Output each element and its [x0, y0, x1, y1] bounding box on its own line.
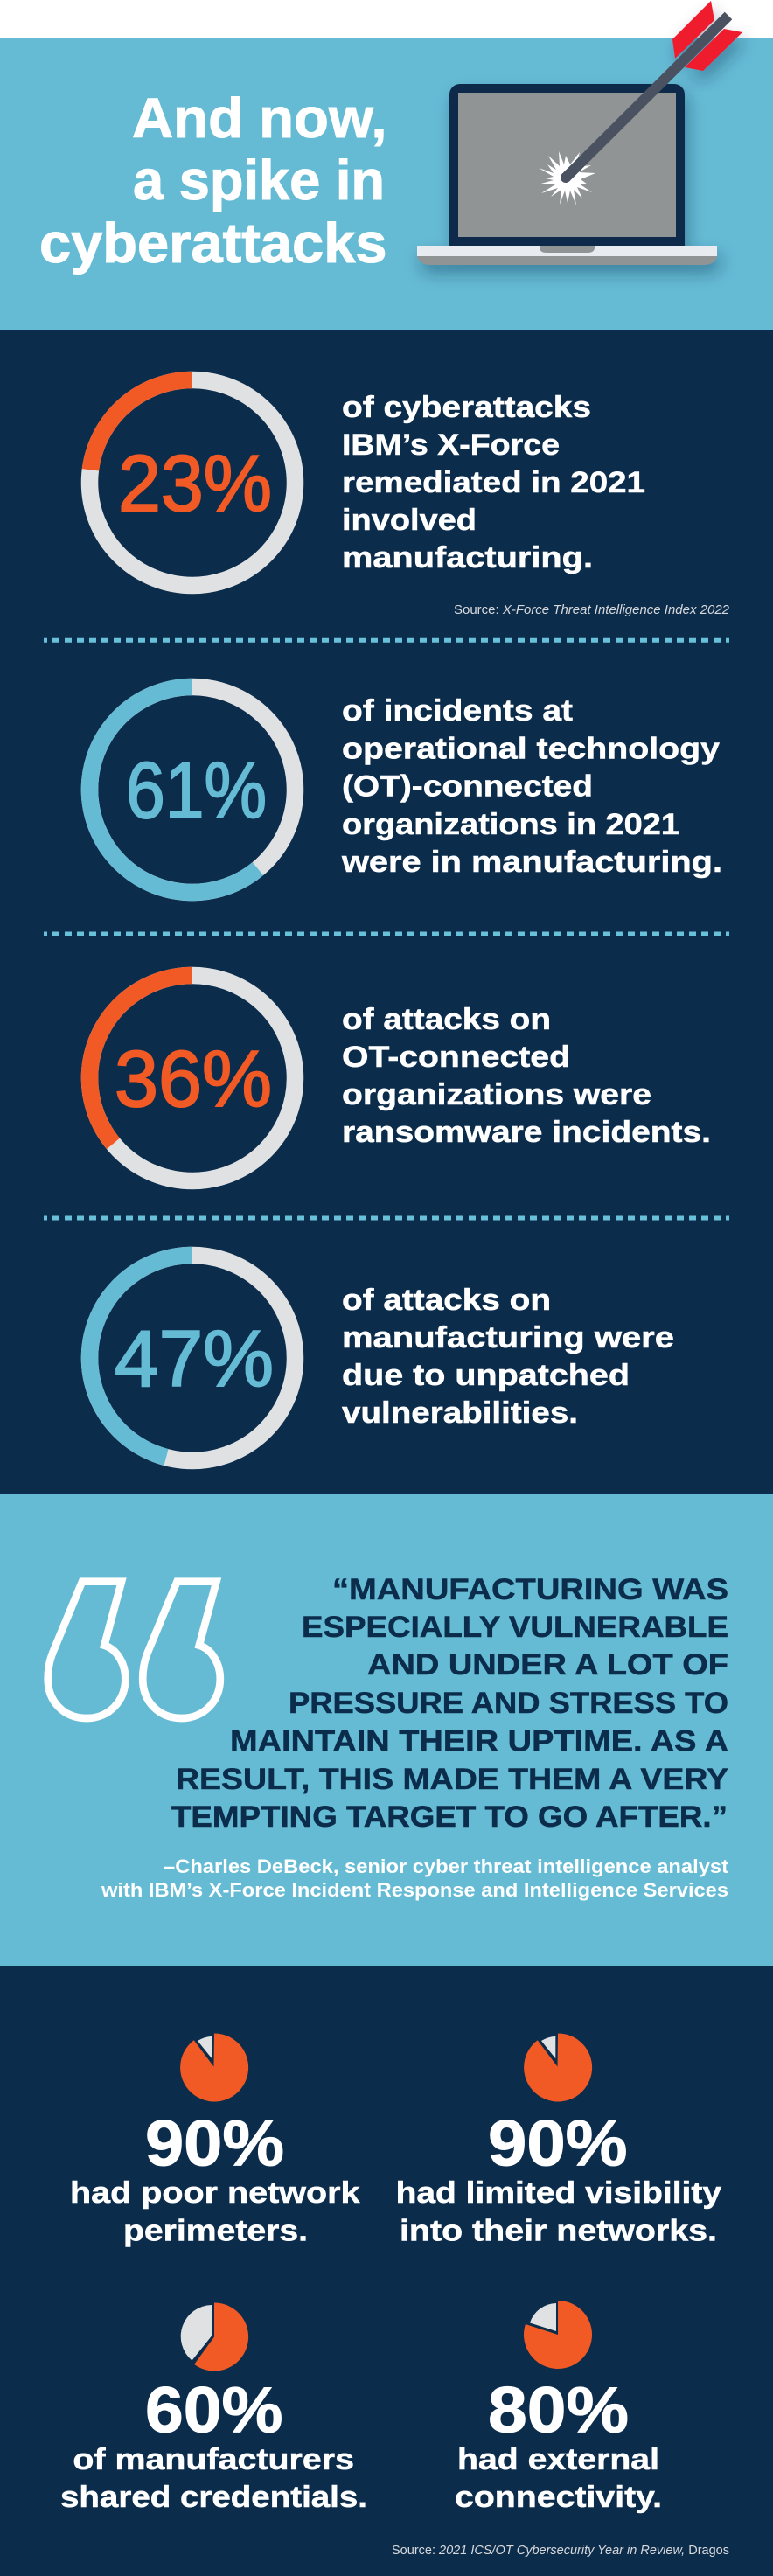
text: 36% description: OT-connected	[342, 1041, 570, 1074]
icon: arrow	[561, 1, 742, 183]
header panel	[0, 1, 773, 330]
text: 36% description: ransomware incidents.	[342, 1116, 711, 1149]
text: 36% description: organizations were	[342, 1078, 651, 1111]
text: 36% description: of attacks on	[342, 1003, 551, 1036]
text: 47% description: due to unpatched	[342, 1359, 630, 1392]
text: 61% description: operational technology	[342, 733, 720, 766]
quote text: PRESSURE AND STRESS TO	[289, 1687, 728, 1720]
text: 36% description	[342, 1003, 711, 1149]
percent: 61%: 61%	[126, 747, 267, 835]
text: 47% description: vulnerabilities.	[342, 1396, 578, 1430]
text: shared credentials: of manufacturers	[73, 2443, 354, 2476]
pie chart: 90%	[524, 2033, 592, 2101]
quote text: MAINTAIN THEIR UPTIME. AS A	[230, 1724, 728, 1758]
text: external connectivity	[455, 2443, 662, 2514]
text: 61% description: of incidents at	[342, 694, 573, 728]
stat: 23%	[89, 379, 729, 617]
stat: 47%	[89, 1256, 674, 1460]
laptop	[417, 84, 717, 265]
percent: 90%: 90%	[145, 2107, 284, 2179]
stat: 36%	[89, 976, 711, 1180]
quote text: “MANUFACTURING WAS	[332, 1573, 728, 1606]
text: limited visibility	[396, 2176, 721, 2247]
text: 47% description: manufacturing were	[342, 1321, 674, 1354]
quote text: TEMPTING TARGET TO GO AFTER.”	[171, 1800, 728, 1834]
text: 23% description: IBM’s X-Force	[342, 428, 560, 462]
text: 61% description: (OT)-connected	[342, 769, 593, 803]
ring chart: 61%	[89, 687, 295, 893]
text: 23% description: of cyberattacks	[342, 391, 591, 424]
title	[39, 87, 386, 275]
panel: pie statistics	[0, 1966, 773, 2576]
text: 61% description: were in manufacturing.	[341, 846, 722, 879]
text: external connectivity: had external	[457, 2443, 659, 2476]
percent: 36%: 36%	[115, 1035, 272, 1124]
text: poor network perimeters: perimeters.	[123, 2214, 308, 2247]
source note: Source: X-Force Threat Intelligence Index 2022	[454, 603, 729, 617]
stat: 61%	[89, 687, 722, 893]
ring chart: 23%	[89, 379, 296, 586]
panel: ring statistics	[0, 330, 773, 1494]
stat: 60% shared credentials	[60, 2303, 367, 2514]
stat: 90% poor network perimeters	[70, 2033, 360, 2247]
icon: quotation marks	[48, 1582, 220, 1718]
title: cyberattacks	[39, 212, 386, 275]
text: shared credentials: shared credentials.	[60, 2481, 367, 2514]
pie chart: 80%	[524, 2301, 592, 2369]
icon: screen crack burst	[538, 151, 595, 205]
pie chart: 60%	[181, 2303, 248, 2371]
title: And now,	[132, 87, 386, 150]
percent: 47%: 47%	[115, 1315, 274, 1403]
title: a spike in	[133, 149, 385, 212]
percent: 90%: 90%	[488, 2107, 628, 2179]
quote text: ESPECIALLY VULNERABLE	[302, 1611, 728, 1644]
percent: 80%: 80%	[488, 2373, 629, 2447]
text: 23% description: remediated in 2021	[342, 466, 645, 499]
stat: 80% external connectivity	[455, 2301, 662, 2514]
text: 47% description: of attacks on	[342, 1284, 551, 1317]
percent: 23%: 23%	[118, 440, 272, 528]
icon: laptop hit by arrow	[417, 1, 742, 265]
ring chart: 47%	[89, 1256, 296, 1460]
text: shared credentials	[60, 2443, 367, 2514]
text: poor network perimeters	[70, 2176, 360, 2247]
stat: 90% limited visibility	[396, 2033, 721, 2247]
text: 23% description: involved	[342, 504, 477, 537]
quote text: RESULT, THIS MADE THEM A VERY	[176, 1763, 728, 1796]
quote attribution: with IBM’s X-Force Incident Response and Intelligence Services	[101, 1879, 728, 1901]
text: external connectivity: connectivity.	[455, 2481, 662, 2514]
panel: quote	[0, 1494, 773, 1966]
text: 23% description	[342, 391, 645, 574]
text: limited visibility: into their networks.	[400, 2214, 717, 2247]
text: 47% description	[342, 1284, 674, 1430]
pie chart: 90%	[180, 2033, 248, 2101]
quote attribution	[101, 1855, 729, 1901]
quote attribution: –Charles DeBeck, senior cyber threat intelligence analyst	[164, 1855, 729, 1877]
source note: Source: 2021 ICS/OT Cybersecurity Year in Review, Dragos	[392, 2544, 729, 2558]
percent: 60%: 60%	[145, 2373, 283, 2447]
quote text: AND UNDER A LOT OF	[367, 1648, 728, 1681]
text: limited visibility: had limited visibility	[396, 2176, 721, 2210]
text: 61% description: organizations in 2021	[342, 808, 679, 841]
quote text	[171, 1573, 728, 1834]
text: poor network perimeters: had poor network	[70, 2176, 360, 2210]
ring chart: 36%	[89, 976, 296, 1180]
text: 23% description: manufacturing.	[342, 541, 593, 574]
text: 61% description	[341, 694, 722, 879]
